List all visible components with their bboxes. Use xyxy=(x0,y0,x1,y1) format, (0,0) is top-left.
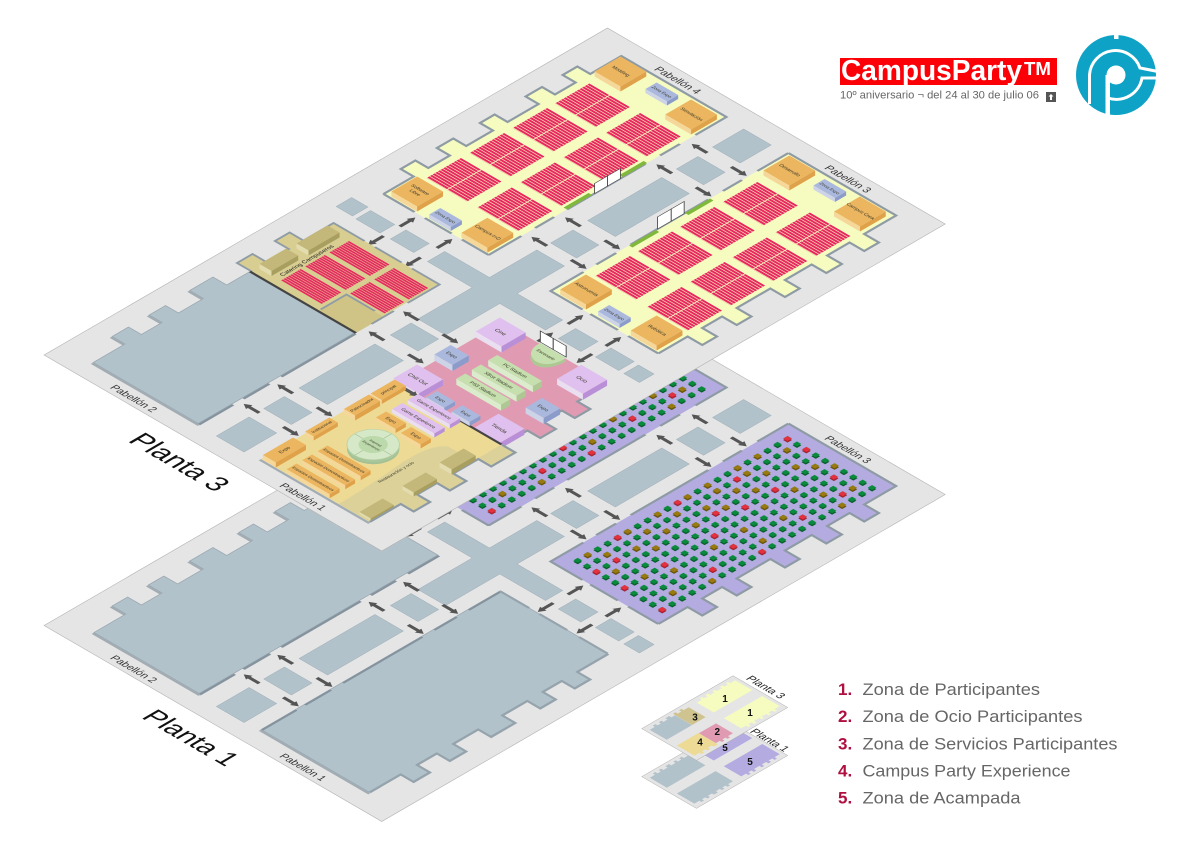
floor plan: Planta 3 xyxy=(6,28,945,573)
box: Patrocinador xyxy=(340,394,384,420)
box: PS3 Stadium xyxy=(451,374,515,411)
mini map number 5: 5 xyxy=(747,757,753,768)
box: Game Experience 2: Game Experience xyxy=(399,407,437,430)
logo: CampusParty wordmark: TM xyxy=(1024,59,1051,79)
mini map numbers upper: 4 xyxy=(697,738,703,748)
panel: pavilion 4 participants: Campus-I+D xyxy=(473,224,502,241)
floor slab with corridors and arrows xyxy=(44,28,945,551)
box: Xbox Stadium xyxy=(467,364,531,402)
box: Expo xyxy=(429,345,474,371)
mini map: zone key xyxy=(642,674,792,808)
panel: pavilion 4 participants: Zona Expo xyxy=(434,211,457,224)
label: Pabellón 3 lower: Pabellón 3 xyxy=(821,435,873,465)
box: Espacios Demostractivos 3: Espacios Demostractivos xyxy=(291,466,336,492)
panel: pavilion 3 participants xyxy=(540,147,911,362)
legend item 1: 1. xyxy=(838,680,852,699)
panel: pavilion 4 participants: Simulación xyxy=(678,107,704,122)
panel: pavilion 3 participants: Desarrollo xyxy=(777,163,802,178)
box: Tienda: Tienda xyxy=(489,423,509,435)
legend item 2: 2. xyxy=(838,707,852,726)
panel: pavilion 2 closed xyxy=(78,264,357,425)
box: Espacios Demostractivos 1: Espacios Demostractivos xyxy=(322,448,367,474)
title: Planta 3: Planta 3 xyxy=(122,429,237,495)
label: Pabellón 1: Pabellón 1 xyxy=(276,482,328,512)
box: Expo left xyxy=(259,438,310,468)
box: Game Experience xyxy=(404,394,464,428)
box: Expo 1 xyxy=(372,412,409,433)
box: Cine xyxy=(471,318,531,352)
box: Expo 2: Expo xyxy=(408,432,423,440)
mini map upper floor xyxy=(642,676,788,760)
floor slab with corridors and arrows xyxy=(44,298,945,822)
stage: Escenario xyxy=(508,331,579,372)
legend item 1: Zona de Participantes xyxy=(862,680,1040,699)
logo: Campus Party circular emblem xyxy=(1076,34,1158,117)
mini map numbers upper: 2 xyxy=(715,727,721,738)
legend item 4: 4. xyxy=(838,762,852,780)
box: Expo right: Expo xyxy=(535,404,550,413)
stage: Escenario: Escenario xyxy=(535,349,557,361)
box: Espacios Demostractivos 2 xyxy=(299,454,359,489)
box: Expo gaming 2: Expo xyxy=(459,410,473,418)
legend item 5: 5. xyxy=(838,788,852,808)
box: principal: principal xyxy=(379,384,398,395)
box: Expo 2 xyxy=(397,427,434,448)
mini map numbers upper: 1 xyxy=(722,694,728,705)
panel: pavilion 3 participants: Zona Expo xyxy=(603,308,626,321)
logo: CampusParty wordmark: CampusParty xyxy=(841,55,1022,87)
panel: zona de ocio pink xyxy=(386,312,632,455)
icon: Internet Experience round stand: Internet xyxy=(368,439,383,448)
panel: catering campuseros xyxy=(236,215,440,333)
icon: Internet Experience round stand: Experience xyxy=(361,440,381,451)
box: Xbox Stadium: XBox Stadium xyxy=(482,371,514,390)
box: Institucional xyxy=(302,418,341,440)
panel: pavilion 4 participants: Libre xyxy=(407,189,422,197)
box: Patrocinador: Patrocinador xyxy=(349,397,376,413)
box: Institucional: Institucional xyxy=(310,420,333,434)
box: PC Stadium: PC Stadium xyxy=(500,363,529,379)
legend: zones xyxy=(838,680,1118,808)
floor plan: Planta 1 xyxy=(8,298,945,843)
legend item 3: Zona de Servicios Participantes xyxy=(862,734,1118,754)
box: Expo: Expo xyxy=(444,351,459,360)
box: Tienda xyxy=(469,414,530,449)
mini map lower floor xyxy=(642,724,788,808)
label: Pabellón 4: Pabellón 4 xyxy=(651,66,703,96)
box: Expo left: Expo xyxy=(277,446,293,455)
box: Expo right xyxy=(520,398,565,424)
pavilion 3 camping area with tents xyxy=(551,424,911,632)
legend item 2: Zona de Ocio Participantes xyxy=(862,707,1082,726)
pavilion 1 lower floor xyxy=(260,591,621,801)
box: Chill Out: Chill Out xyxy=(405,373,429,387)
box: Chill Out xyxy=(388,364,448,400)
pavilion 4 camping strip xyxy=(371,319,726,526)
mini map number 5 hidden: 5 xyxy=(722,743,728,754)
box: Espacios Demostractivos 3 xyxy=(283,464,343,498)
legend item 5: Zona de Acampada xyxy=(862,788,1021,808)
label: Pabellón 3: Pabellón 3 xyxy=(821,164,873,195)
box: Cine: Cine xyxy=(492,328,507,337)
box: Espacios Demostractivos 2: Espacios Demostractivos xyxy=(306,457,351,483)
panel: campus party experience yellow xyxy=(257,372,530,530)
logo: CampusParty wordmark: 10º aniversario ¬ del 24 al 30 de julio 06 xyxy=(840,90,1039,102)
label: Pabellón 2 lower: Pabellón 2 xyxy=(107,654,159,685)
box: Game Experience 2 xyxy=(389,403,448,438)
logo: CampusParty wordmark xyxy=(840,55,1057,102)
legend item 3: 3. xyxy=(838,734,852,754)
pavilion 2 lower floor xyxy=(79,486,440,695)
box: Expo 1: Expo xyxy=(383,416,398,425)
box: Expo gaming xyxy=(423,391,458,412)
legend item 4: Campus Party Experience xyxy=(862,762,1070,780)
boxes: restauración kiosks xyxy=(355,448,480,521)
panel: pavilion 3 participants: Campus Crea xyxy=(844,202,876,221)
box: PC Stadium xyxy=(483,355,547,392)
box: Espacios Demostractivos 1 xyxy=(314,446,374,480)
box: Expo gaming 2 xyxy=(448,405,484,426)
box: Game Experience: Game Experience xyxy=(414,398,453,421)
mini map numbers upper: 3 xyxy=(692,712,698,724)
box: Ocio: Ocio xyxy=(574,375,589,384)
mini map numbers upper xyxy=(692,694,753,748)
box: Expo gaming: Expo xyxy=(434,396,447,404)
label: Restauración y ocio: Restauración y ocio xyxy=(376,461,416,484)
panel: pavilion 3 participants: Astronomía xyxy=(572,282,600,297)
box: PS3 Stadium: PS3 Stadium xyxy=(467,381,498,398)
panel: pavilion 4 participants: Modding xyxy=(610,65,631,78)
panel: catering campuseros: Catering Campuseros xyxy=(278,244,336,278)
panel: pavilion 4 participants xyxy=(371,48,726,255)
box: Ocio xyxy=(552,365,612,400)
title: Planta 1: Planta 1 xyxy=(135,705,247,770)
mini map label Planta 3: Planta 3 xyxy=(743,674,788,701)
mini map numbers upper: 1 xyxy=(747,708,753,719)
box: principal xyxy=(367,380,409,404)
icon: Internet Experience round stand xyxy=(332,423,414,470)
panel: pavilion 4 participants: Zona Expo xyxy=(650,85,674,99)
panel: pavilion 3 participants: Robótica xyxy=(646,324,668,337)
label: Pabellón 2: Pabellón 2 xyxy=(107,384,159,414)
panel: pavilion 4 participants: Software xyxy=(409,184,431,197)
panel: pavilion 3 participants: Zona Expo xyxy=(818,182,842,195)
mini map label Planta 1: Planta 1 xyxy=(747,727,792,754)
label: Pabellón 1 lower: Pabellón 1 xyxy=(276,753,328,783)
